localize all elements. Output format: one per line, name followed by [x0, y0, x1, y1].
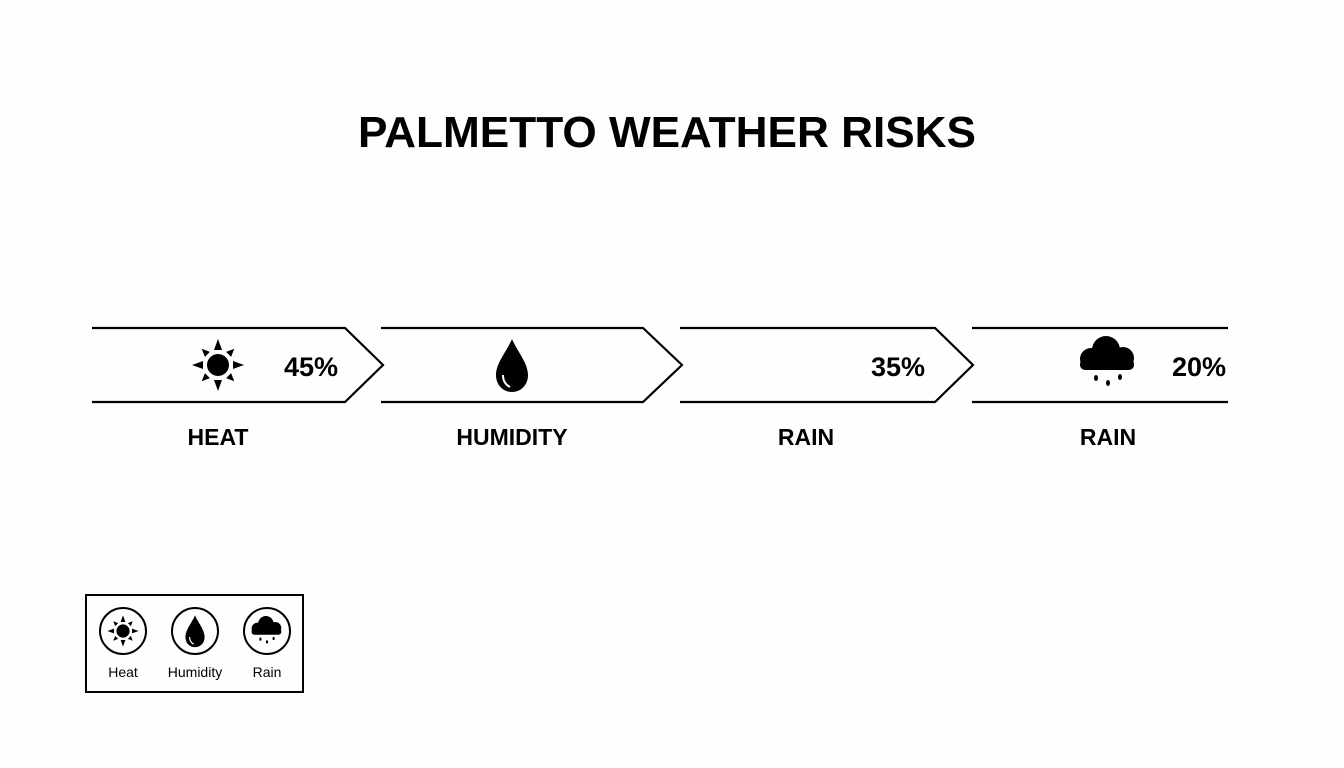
rain percentage: 35% [871, 352, 925, 382]
arrow segment: rain [680, 328, 973, 402]
labels: RAIN [778, 424, 834, 450]
labels [188, 424, 1136, 450]
labels: RAIN [1080, 424, 1136, 450]
legend: heat: Heat [108, 664, 138, 680]
title: PALMETTO WEATHER RISKS [358, 108, 976, 157]
labels: HEAT [188, 424, 248, 450]
segment: rain 2 [972, 328, 1228, 402]
rain 2 percentage: 20% [1172, 352, 1226, 382]
legend: rain [244, 608, 290, 680]
legend: rain: Rain [253, 664, 281, 680]
icon: rain cloud [1080, 336, 1134, 386]
heat percentage: 45% [284, 352, 338, 382]
icon: sun [185, 332, 251, 398]
labels: HUMIDITY [456, 424, 568, 450]
legend: humidity [168, 608, 222, 680]
arrow segment: humidity [381, 328, 682, 402]
legend: humidity: Humidity [168, 664, 222, 680]
arrow segment: heat [92, 328, 383, 402]
icon: drop [496, 339, 528, 392]
legend [86, 595, 303, 692]
legend: heat [100, 608, 146, 680]
